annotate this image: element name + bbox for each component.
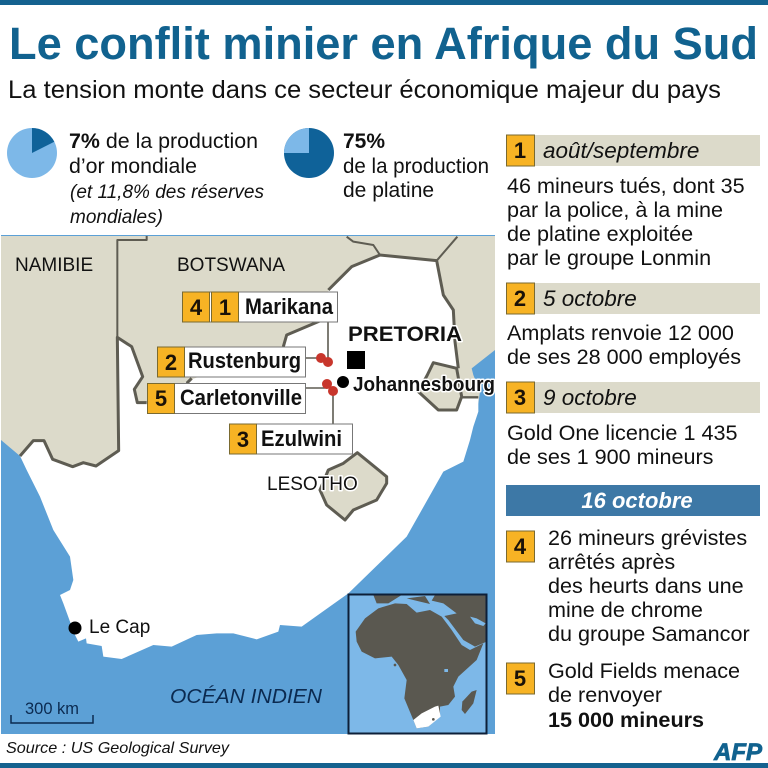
event 2 heading: 2 <box>514 286 526 311</box>
label: Marikana: 4 <box>190 295 203 320</box>
event 1 text: par le groupe Lonmin <box>507 245 711 270</box>
city: Pretoria: PRETORIA <box>348 323 462 346</box>
South Africa territory <box>20 255 478 659</box>
city: Johannesbourg: Johannesbourg <box>353 374 495 396</box>
event 5: 5 <box>514 666 526 691</box>
label: Carletonville: Carletonville <box>180 385 302 410</box>
label: Carletonville: 5 <box>155 386 167 411</box>
label: Carletonville <box>148 384 306 414</box>
label: Rustenburg: Rustenburg <box>188 348 301 373</box>
label: Ezulwini: 3 <box>237 427 249 452</box>
text: gold production: mondiales) <box>70 207 163 228</box>
country labels <box>15 255 358 495</box>
borders <box>20 236 478 467</box>
text: gold production <box>69 130 264 228</box>
event 5: de renvoyer <box>548 682 662 707</box>
country labels: NAMIBIE <box>15 255 93 276</box>
title: Le conflit minier en Afrique du Sud <box>9 18 758 69</box>
inset: Africa locator <box>348 594 487 734</box>
event 1 text: par la police, à la mine <box>507 197 723 222</box>
event 2 heading <box>506 283 760 314</box>
event 1 text: 46 mineurs tués, dont 35 <box>507 173 745 198</box>
event 1 text: de platine exploitée <box>507 221 693 246</box>
source: Source : US Geological Survey <box>6 740 230 757</box>
event 2 heading: 5 octobre <box>543 286 637 311</box>
text: platinum production <box>343 130 489 202</box>
event 2 text: Amplats renvoie 12 000 <box>507 320 734 345</box>
city: Pretoria <box>347 323 462 369</box>
event 4 <box>506 525 750 646</box>
label: Rustenburg: 2 <box>165 350 177 375</box>
AFP logo: AFP <box>713 739 763 766</box>
event 1 heading: 1 <box>514 138 526 163</box>
event 1 text <box>507 173 745 270</box>
event 2 text <box>507 320 741 369</box>
map of South Africa <box>1 235 495 734</box>
neighbouring land <box>1 236 495 490</box>
label: Ezulwini: Ezulwini <box>261 426 342 451</box>
event 3 text: Gold One licencie 1 435 <box>507 420 737 445</box>
event 5 <box>506 658 740 732</box>
event 5: 15 000 mineurs <box>548 707 704 732</box>
event 4: 4 <box>514 534 527 559</box>
event 4: du groupe Samancor <box>548 621 750 646</box>
text: gold production: 7% de la production <box>69 130 258 153</box>
date banner: 16 octobre: 16 octobre <box>581 488 693 513</box>
country labels: LESOTHO <box>267 474 358 495</box>
event 3 text: de ses 1 900 mineurs <box>507 444 714 469</box>
event 2 text: de ses 28 000 employés <box>507 344 741 369</box>
event 5: Gold Fields menace <box>548 658 740 683</box>
text: platinum production: de platine <box>343 179 434 202</box>
event 3 heading: 3 <box>514 385 526 410</box>
event 4: des heurts dans une <box>548 573 744 598</box>
Swaziland <box>418 363 462 410</box>
Lesotho <box>320 453 387 520</box>
text: platinum production: de la production <box>343 155 489 178</box>
label: Marikana: Marikana <box>245 294 333 319</box>
pie chart: platinum 75% <box>284 128 334 178</box>
event 4: 26 mineurs grévistes <box>548 525 747 550</box>
event 3 text <box>507 420 737 469</box>
label: Marikana <box>182 292 338 322</box>
pie chart: gold 7% <box>7 128 57 178</box>
event 3 heading: 9 octobre <box>543 385 637 410</box>
event 1 heading <box>506 135 760 166</box>
text: gold production: (et 11,8% des réserves <box>70 182 264 203</box>
label: Marikana: 1 <box>219 295 231 320</box>
subtitle: La tension monte dans ce secteur économique majeur du pays <box>8 76 721 104</box>
scale bar <box>11 699 93 723</box>
city: Le Cap: Le Cap <box>89 617 150 638</box>
label: Rustenburg <box>158 347 306 377</box>
event 4: mine de chrome <box>548 597 703 622</box>
date banner: 16 octobre <box>506 485 760 516</box>
event 3 heading <box>506 382 760 413</box>
country labels: BOTSWANA <box>177 255 285 276</box>
label: Ezulwini <box>230 424 352 454</box>
text: platinum production: 75% <box>343 130 385 153</box>
leader lines and mine markers <box>306 322 338 424</box>
event 1 heading: août/septembre <box>543 138 699 163</box>
event 4: arrêtés après <box>548 549 675 574</box>
ocean label: OCÉAN INDIEN <box>170 685 323 708</box>
scale bar: 300 km <box>25 699 79 718</box>
text: gold production: d’or mondiale <box>69 155 197 178</box>
